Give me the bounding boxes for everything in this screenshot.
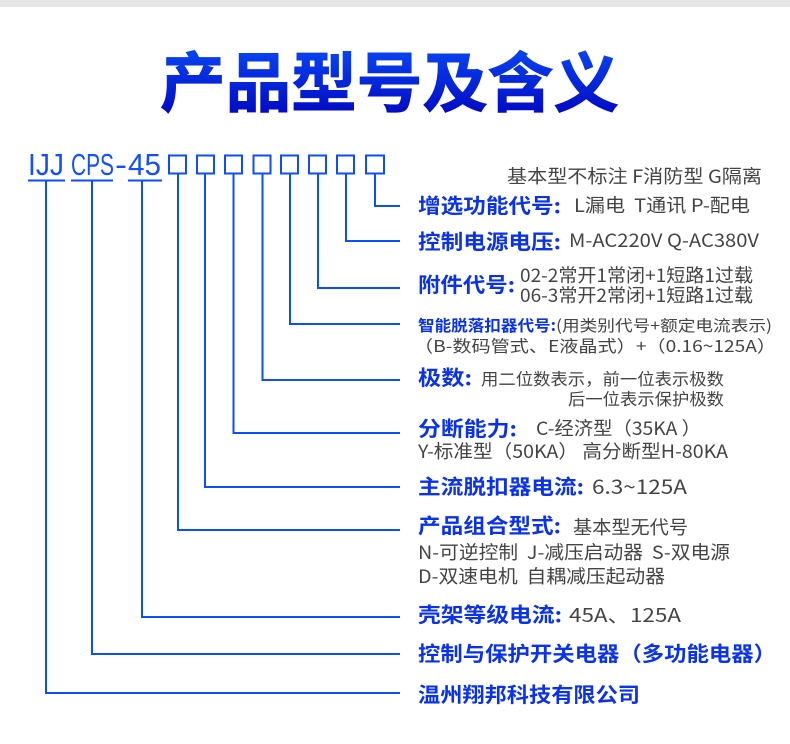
row: poles: 极数:	[418, 361, 472, 391]
row: main trip current	[418, 470, 687, 500]
row: main trip current: 6.3~125A	[592, 471, 687, 500]
row: control supply voltage: M-AC220V Q-AC380V	[569, 227, 759, 253]
row: optional function code	[418, 189, 750, 219]
row: poles: 用二位数表示，前一位表示极数	[481, 366, 725, 390]
row: breaking capacity: Y-标准型（50KA） 高分断型H-80KA	[417, 438, 729, 464]
row: product combination type: 产品组合型式:	[418, 509, 561, 539]
row: poles	[418, 361, 725, 410]
row: optional function code: L漏电 T通讯 P-配电	[574, 192, 750, 218]
row: frame rated current: 45A、125A	[569, 601, 682, 628]
row: optional function code: 增选功能代号:	[418, 189, 561, 219]
row: breaking capacity: C-经济型（35KA ）	[536, 415, 701, 441]
row: company name: 温州翔邦科技有限公司	[418, 678, 640, 708]
row: product combination type: 基本型无代号	[573, 514, 688, 540]
top grey band	[0, 0, 790, 7]
row: poles: 后一位表示保护极数	[568, 386, 725, 410]
row: product combination type	[418, 509, 730, 589]
row: control and protection switch: 控制与保护开关电器（多功能电器）	[418, 637, 776, 667]
model code row	[28, 147, 384, 182]
row: frame rated current: 壳架等级电流:	[418, 598, 562, 628]
row: smart trip unit code: （B-数码管式、E液晶式）+（0.16~125A）	[414, 333, 776, 357]
row: accessory code: 附件代号:	[418, 268, 515, 298]
model code text: CPS: CPS	[71, 147, 114, 182]
row: control supply voltage	[418, 225, 759, 255]
row: smart trip unit code: (用类别代号+额定电流表示)	[556, 314, 772, 336]
row: accessory code: 02-2常开1常闭+1短路1过载	[520, 262, 753, 288]
row: accessory code	[418, 262, 753, 308]
code placeholder boxes	[169, 156, 384, 174]
row: smart trip unit code: 智能脱落扣器代号:	[418, 314, 556, 336]
model code text: IJJ: IJJ	[28, 147, 64, 182]
row: frame rated current	[418, 598, 682, 628]
title: 产品型号及含义	[160, 31, 619, 125]
code underlines	[28, 180, 162, 182]
connector lines	[46, 173, 400, 693]
note: base type: 基本型不标注 F消防型 G隔离	[507, 163, 762, 189]
row: breaking capacity: 分断能力:	[418, 412, 517, 442]
row: breaking capacity	[417, 412, 729, 464]
model code text: 45: 45	[128, 147, 161, 182]
row: product combination type: N-可逆控制 J-减压启动器 S-双电源	[418, 539, 730, 565]
row: product combination type: D-双速电机 自耦减压起动器	[418, 563, 665, 589]
row: smart trip unit code	[414, 314, 776, 357]
row: control supply voltage: 控制电源电压:	[418, 225, 561, 255]
row: main trip current: 主流脱扣器电流:	[418, 470, 584, 500]
model code text: dash: -	[115, 147, 127, 182]
row: accessory code: 06-3常开2常闭+1短路1过载	[520, 282, 753, 308]
